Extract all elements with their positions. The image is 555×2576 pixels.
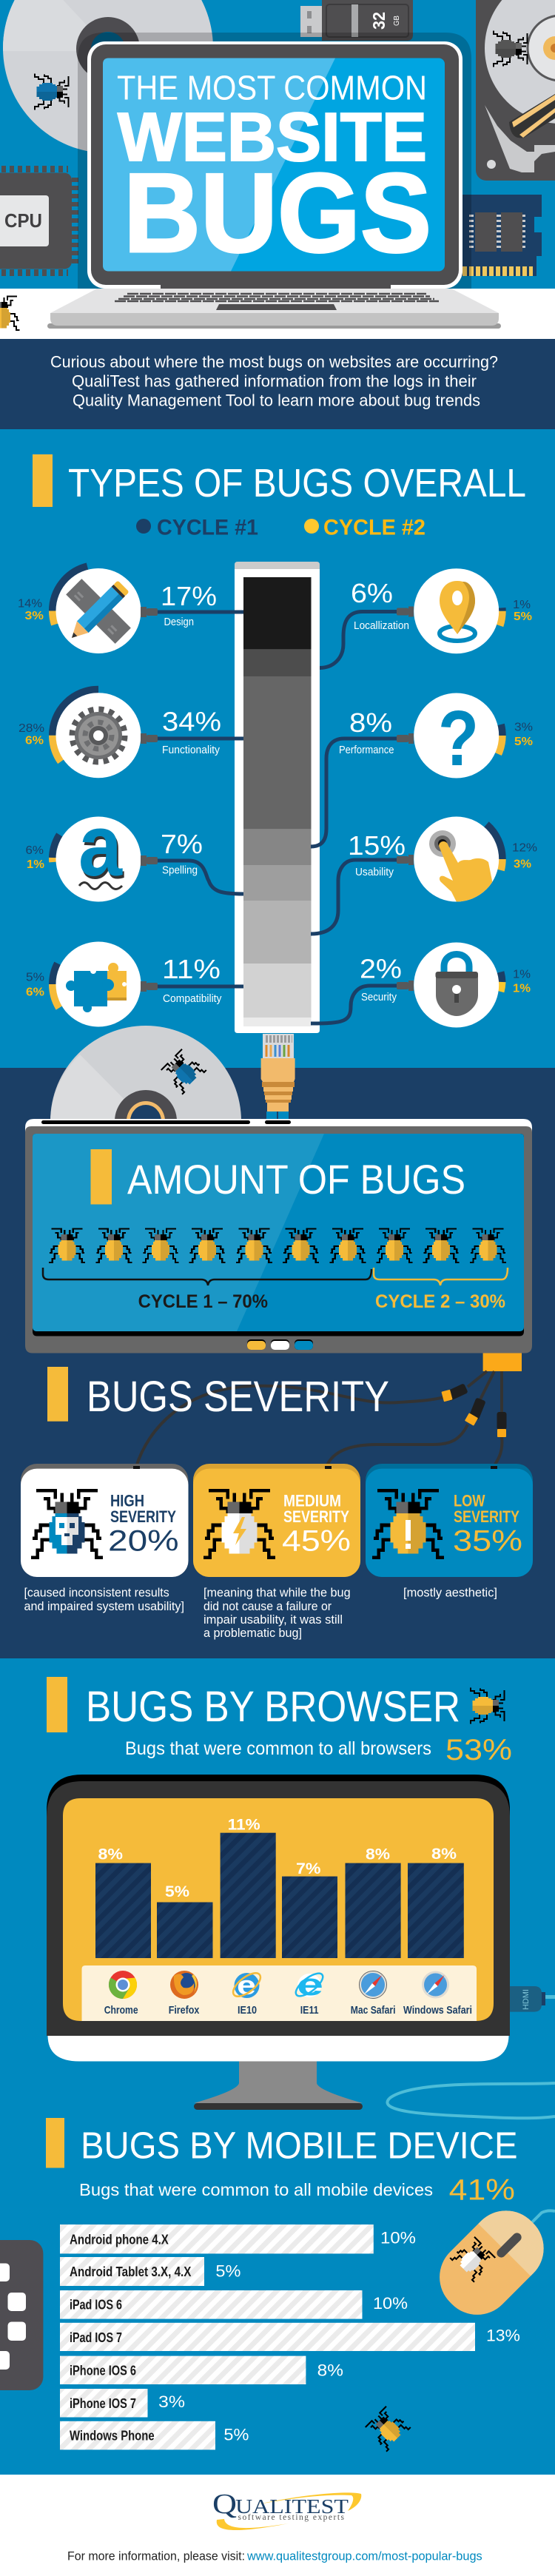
title — [117, 69, 431, 276]
icon: RAM module — [459, 195, 542, 276]
horizontal bar chart: mobile devices: 5% — [223, 2425, 249, 2444]
footer link: www.qualitestgroup.com/most-popular-bugs — [246, 2549, 482, 2563]
subheading: common mobile bugs: Bugs that were common to all mobile devices — [79, 2180, 433, 2199]
icon: IE10 — [229, 1969, 264, 2000]
subheading: common browser bugs — [125, 1734, 512, 1766]
intro text: QualiTest has gathered information from the logs in their — [72, 371, 477, 390]
label: high severity — [108, 1492, 179, 1558]
stat: 2% security: Security — [361, 991, 397, 1003]
icon: puzzle pieces — [66, 963, 127, 1012]
icon: Chrome — [109, 1971, 137, 1999]
cycle values — [514, 722, 533, 748]
title: BUGS — [124, 150, 431, 276]
cycle values — [26, 972, 44, 999]
stat: 6% localization: 6% — [351, 578, 393, 608]
subheading: common browser bugs: 53% — [445, 1734, 512, 1766]
cable plug — [397, 607, 414, 617]
cycle values: 6% — [26, 986, 44, 999]
label: low severity — [453, 1492, 522, 1558]
caption: medium severity — [204, 1586, 351, 1640]
stat: 7% spelling: Spelling — [162, 864, 198, 877]
stat: 6% localization: Locallization — [354, 619, 409, 632]
cable plug — [141, 607, 158, 617]
browser names: IE11 — [300, 2004, 319, 2017]
horizontal bar chart: mobile devices: 13% — [486, 2327, 520, 2345]
bar chart: browsers: 5% — [165, 1883, 189, 1900]
stat: 34% functionality: Functionality — [162, 744, 220, 756]
icon: finger pressing button — [429, 830, 493, 907]
caption: high severity: [caused inconsistent results — [24, 1586, 169, 1600]
label: medium severity: MEDIUM — [283, 1492, 341, 1510]
caption: high severity: and impaired system usability] — [24, 1599, 184, 1613]
cycle values: 5% — [514, 736, 533, 748]
icon: bug with lightning — [204, 1490, 275, 1558]
stat: 17% design: 17% — [161, 581, 217, 611]
intro text: Curious about where the most bugs on websites are occurring? — [50, 353, 498, 371]
stat: 11% compatibility — [162, 954, 222, 1005]
horizontal bar chart: mobile devices: iPad IOS 7 — [70, 2330, 122, 2345]
cycle values — [512, 842, 537, 871]
icon: blue bug on disc — [35, 74, 68, 110]
browser legend strip — [81, 1965, 477, 2021]
stat: 15% usability — [348, 830, 406, 878]
icon: network plug between column and monitor — [261, 1034, 295, 1121]
label: low severity: SEVERITY — [454, 1507, 519, 1526]
bar chart: browsers: 8% — [366, 1846, 390, 1863]
mouse cable loop — [387, 2083, 555, 2118]
stat: 2% security — [360, 954, 402, 1003]
horizontal bar chart: mobile devices: iPad IOS 6 — [70, 2298, 122, 2313]
cycle values: 1% — [513, 983, 531, 995]
icon: IE10: e — [237, 1970, 256, 2000]
icon: question mark: ? — [438, 695, 479, 782]
caption: medium severity: [meaning that while the bug — [204, 1586, 351, 1600]
stand — [194, 2061, 363, 2110]
icon: padlock — [435, 955, 478, 1016]
caption: low severity: [mostly aesthetic] — [403, 1586, 497, 1600]
stat: 11% compatibility: Compatibility — [163, 992, 222, 1005]
cycle values: 14% — [18, 598, 42, 611]
hub and cables to severity cards — [136, 1353, 522, 1467]
icon: computer mouse — [440, 2209, 555, 2315]
bar chart: browsers: 11% — [228, 1816, 260, 1834]
label: cycle 1 share: CYCLE 1 – 70% — [138, 1291, 268, 1312]
cycle values: 3% — [514, 858, 531, 871]
monitor buttons — [247, 1339, 313, 1350]
HDMI plug — [510, 1986, 555, 2012]
cable plug — [397, 733, 414, 744]
bar chart: browsers: 7% — [296, 1860, 321, 1877]
cycle values: 12% — [512, 842, 537, 855]
category: compatibility — [26, 941, 222, 1027]
icon: IE11 — [292, 1967, 326, 2002]
label: high severity: SEVERITY — [110, 1507, 176, 1526]
stat: 11% compatibility: 11% — [162, 954, 221, 984]
cycle values: 6% — [25, 735, 44, 747]
logo: Qualitest: UALITEST — [235, 2495, 349, 2518]
horizontal bar chart: mobile devices: Windows Phone — [70, 2428, 155, 2443]
cycle values: 28% — [18, 722, 44, 735]
horizontal bar chart: mobile devices — [60, 2224, 520, 2449]
logo: Qualitest: software testing experts — [238, 2513, 345, 2522]
card: high severity — [21, 1464, 188, 1577]
icon: Firefox — [170, 1971, 198, 1999]
caption: medium severity: impair usability, it was still — [204, 1612, 343, 1627]
legend: cycles: CYCLE #1 — [157, 516, 258, 540]
card: low severity — [366, 1464, 533, 1577]
stat: 7% spelling: 7% — [161, 829, 203, 859]
icon: map pin — [440, 581, 475, 641]
icon: bug on half disc — [159, 1047, 206, 1094]
icon: bug on hard drive — [494, 31, 527, 67]
stat: 7% spelling — [161, 829, 203, 877]
label: low severity: 35% — [453, 1525, 522, 1558]
icon: bug with skull — [31, 1490, 103, 1558]
cycle values — [18, 722, 44, 747]
category: performance — [339, 693, 533, 782]
cycle values — [18, 598, 44, 622]
bar chart: browsers — [95, 1816, 464, 1958]
icon: CPU chip: CPU — [4, 209, 42, 232]
bar chart: browsers: 8% — [98, 1846, 123, 1863]
title: WEBSITE — [118, 98, 427, 175]
icon: USB stick — [300, 0, 413, 41]
stat: 8% performance: Performance — [339, 744, 394, 756]
heading: bugs severity: BUGS SEVERITY — [87, 1373, 389, 1421]
stat: 34% functionality — [162, 707, 221, 756]
pictogram: ten bugs — [49, 1228, 506, 1262]
header illustration: computer hardware and laptop — [0, 0, 555, 330]
cycle values: 3% — [25, 610, 44, 622]
cycle values — [25, 844, 44, 871]
label: medium severity — [282, 1492, 351, 1558]
stat: 17% design: Design — [164, 616, 194, 628]
brace: cycle 1 — [43, 1268, 371, 1285]
subheading: common browser bugs: Bugs that were common to all browsers — [125, 1738, 431, 1759]
category: usability — [348, 817, 537, 907]
caption: medium severity: a problematic bug] — [204, 1626, 302, 1640]
icon: half disc in monitor slot — [50, 1026, 241, 1121]
subheading: common mobile bugs: 41% — [449, 2174, 515, 2207]
browser names: Chrome — [104, 2004, 138, 2017]
cable plug — [141, 733, 158, 744]
browser names: Windows Safari — [403, 2004, 472, 2017]
footer link — [67, 2549, 482, 2563]
laptop drop shadow — [78, 33, 471, 289]
category: functionality — [18, 690, 221, 778]
icon: hard disk drive — [476, 0, 555, 181]
horizontal bar chart: mobile devices: Android phone 4.X — [70, 2232, 169, 2247]
category: design — [18, 566, 217, 653]
category: spelling — [25, 797, 203, 901]
icon: CPU chip — [0, 169, 75, 272]
heading: bugs by mobile device: BUGS BY MOBILE DEVICE — [81, 2124, 518, 2166]
desktop monitor: bugs by browser — [47, 1775, 555, 2110]
icon: pencil and ruler — [66, 579, 131, 644]
connector cables — [152, 611, 403, 1023]
monitor: amount of bugs — [25, 1119, 532, 1353]
logo: Qualitest: Q — [212, 2489, 237, 2520]
cycle values: 5% — [26, 972, 44, 984]
stat: 34% functionality: 34% — [162, 707, 221, 737]
bar chart: browsers: 8% — [431, 1846, 457, 1863]
laptop — [47, 41, 501, 329]
stat: 15% usability: Usability — [355, 866, 394, 878]
icon: bug next to heading — [471, 1687, 505, 1724]
brace: cycle 2 — [374, 1268, 508, 1285]
cable plug — [141, 981, 158, 992]
subheading: common mobile bugs — [79, 2174, 515, 2207]
icon: yellow bug near chart — [363, 2404, 411, 2452]
intro text — [50, 353, 498, 409]
category: security — [360, 943, 531, 1027]
card: medium severity — [193, 1464, 360, 1577]
stacked column: share of bug types — [235, 562, 320, 1033]
label: cycle 2 share: CYCLE 2 – 30% — [375, 1291, 505, 1312]
label: low severity: LOW — [454, 1492, 485, 1510]
stat: 8% performance — [339, 707, 394, 756]
horizontal bar chart: mobile devices: iPhone IOS 7 — [70, 2396, 136, 2411]
cycle values — [513, 599, 532, 623]
cable plug — [397, 855, 414, 865]
icon: yellow bug at left edge — [0, 296, 19, 330]
title: THE MOST COMMON — [117, 69, 427, 107]
heading: bugs by browser: BUGS BY BROWSER — [86, 1683, 460, 1731]
horizontal bar chart: mobile devices: 8% — [317, 2361, 343, 2380]
icon: Mac Safari — [360, 1971, 386, 1998]
horizontal bar chart: mobile devices: Android Tablet 3.X, 4.X — [70, 2264, 191, 2279]
label: medium severity: SEVERITY — [283, 1507, 349, 1526]
intro text: Quality Management Tool to learn more about bug trends — [73, 391, 480, 409]
stat: 17% design — [161, 581, 217, 628]
label: high severity: 20% — [108, 1525, 179, 1558]
cycle values: 1% — [513, 599, 531, 611]
caption: medium severity: did not cause a failure or — [204, 1599, 332, 1613]
browser names — [104, 2004, 472, 2017]
icon: white bug on mouse — [450, 2235, 497, 2282]
browser names: Mac Safari — [351, 2004, 395, 2017]
HDMI plug: HDMI — [522, 1989, 531, 2010]
cycle values: 6% — [25, 844, 44, 857]
cable plug — [397, 981, 414, 991]
stat: 2% security: 2% — [360, 954, 402, 984]
caption: high severity — [24, 1586, 184, 1613]
cycle values: 5% — [514, 611, 532, 623]
stat: 6% localization — [351, 578, 409, 632]
heading: amount of bugs: AMOUNT OF BUGS — [127, 1156, 465, 1203]
icon: bug with exclamation mark — [372, 1490, 444, 1558]
icon: Windows Safari — [422, 1971, 449, 1998]
horizontal bar chart: mobile devices: 5% — [215, 2262, 240, 2281]
label: medium severity: 45% — [282, 1525, 351, 1558]
cycle values: 1% — [513, 969, 531, 981]
icon: letter a with squiggle: a — [78, 797, 123, 895]
icon: USB stick: GB — [393, 16, 401, 26]
label: high severity: HIGH — [110, 1492, 144, 1510]
icon: gear — [73, 710, 124, 761]
horizontal bar chart: mobile devices: 10% — [380, 2229, 416, 2247]
cycle values: 3% — [514, 722, 533, 734]
cable plug — [141, 855, 158, 866]
category: localization — [351, 568, 532, 653]
icon: compact disc — [0, 0, 213, 153]
horizontal bar chart: mobile devices: iPhone IOS 6 — [70, 2364, 136, 2378]
cycle values — [513, 969, 531, 995]
browser names: IE10 — [238, 2004, 257, 2017]
legend: cycles — [136, 516, 426, 540]
browser names: Firefox — [169, 2004, 200, 2017]
icon: phone on left edge — [0, 2240, 43, 2390]
logo: Qualitest — [212, 2489, 361, 2530]
icon: USB stick: 32 — [369, 12, 388, 30]
stat: 15% usability: 15% — [348, 830, 406, 861]
stat: 8% performance: 8% — [349, 707, 392, 738]
horizontal bar chart: mobile devices: 10% — [373, 2294, 408, 2313]
legend: cycles: CYCLE #2 — [323, 516, 426, 540]
footer link: For more information, please visit: — [67, 2549, 245, 2563]
icon: letter a with squiggle: a — [80, 800, 124, 898]
horizontal bar chart: mobile devices: 3% — [158, 2392, 185, 2411]
icon: IE11: e — [297, 1967, 323, 2002]
cycle values: 1% — [27, 858, 44, 871]
